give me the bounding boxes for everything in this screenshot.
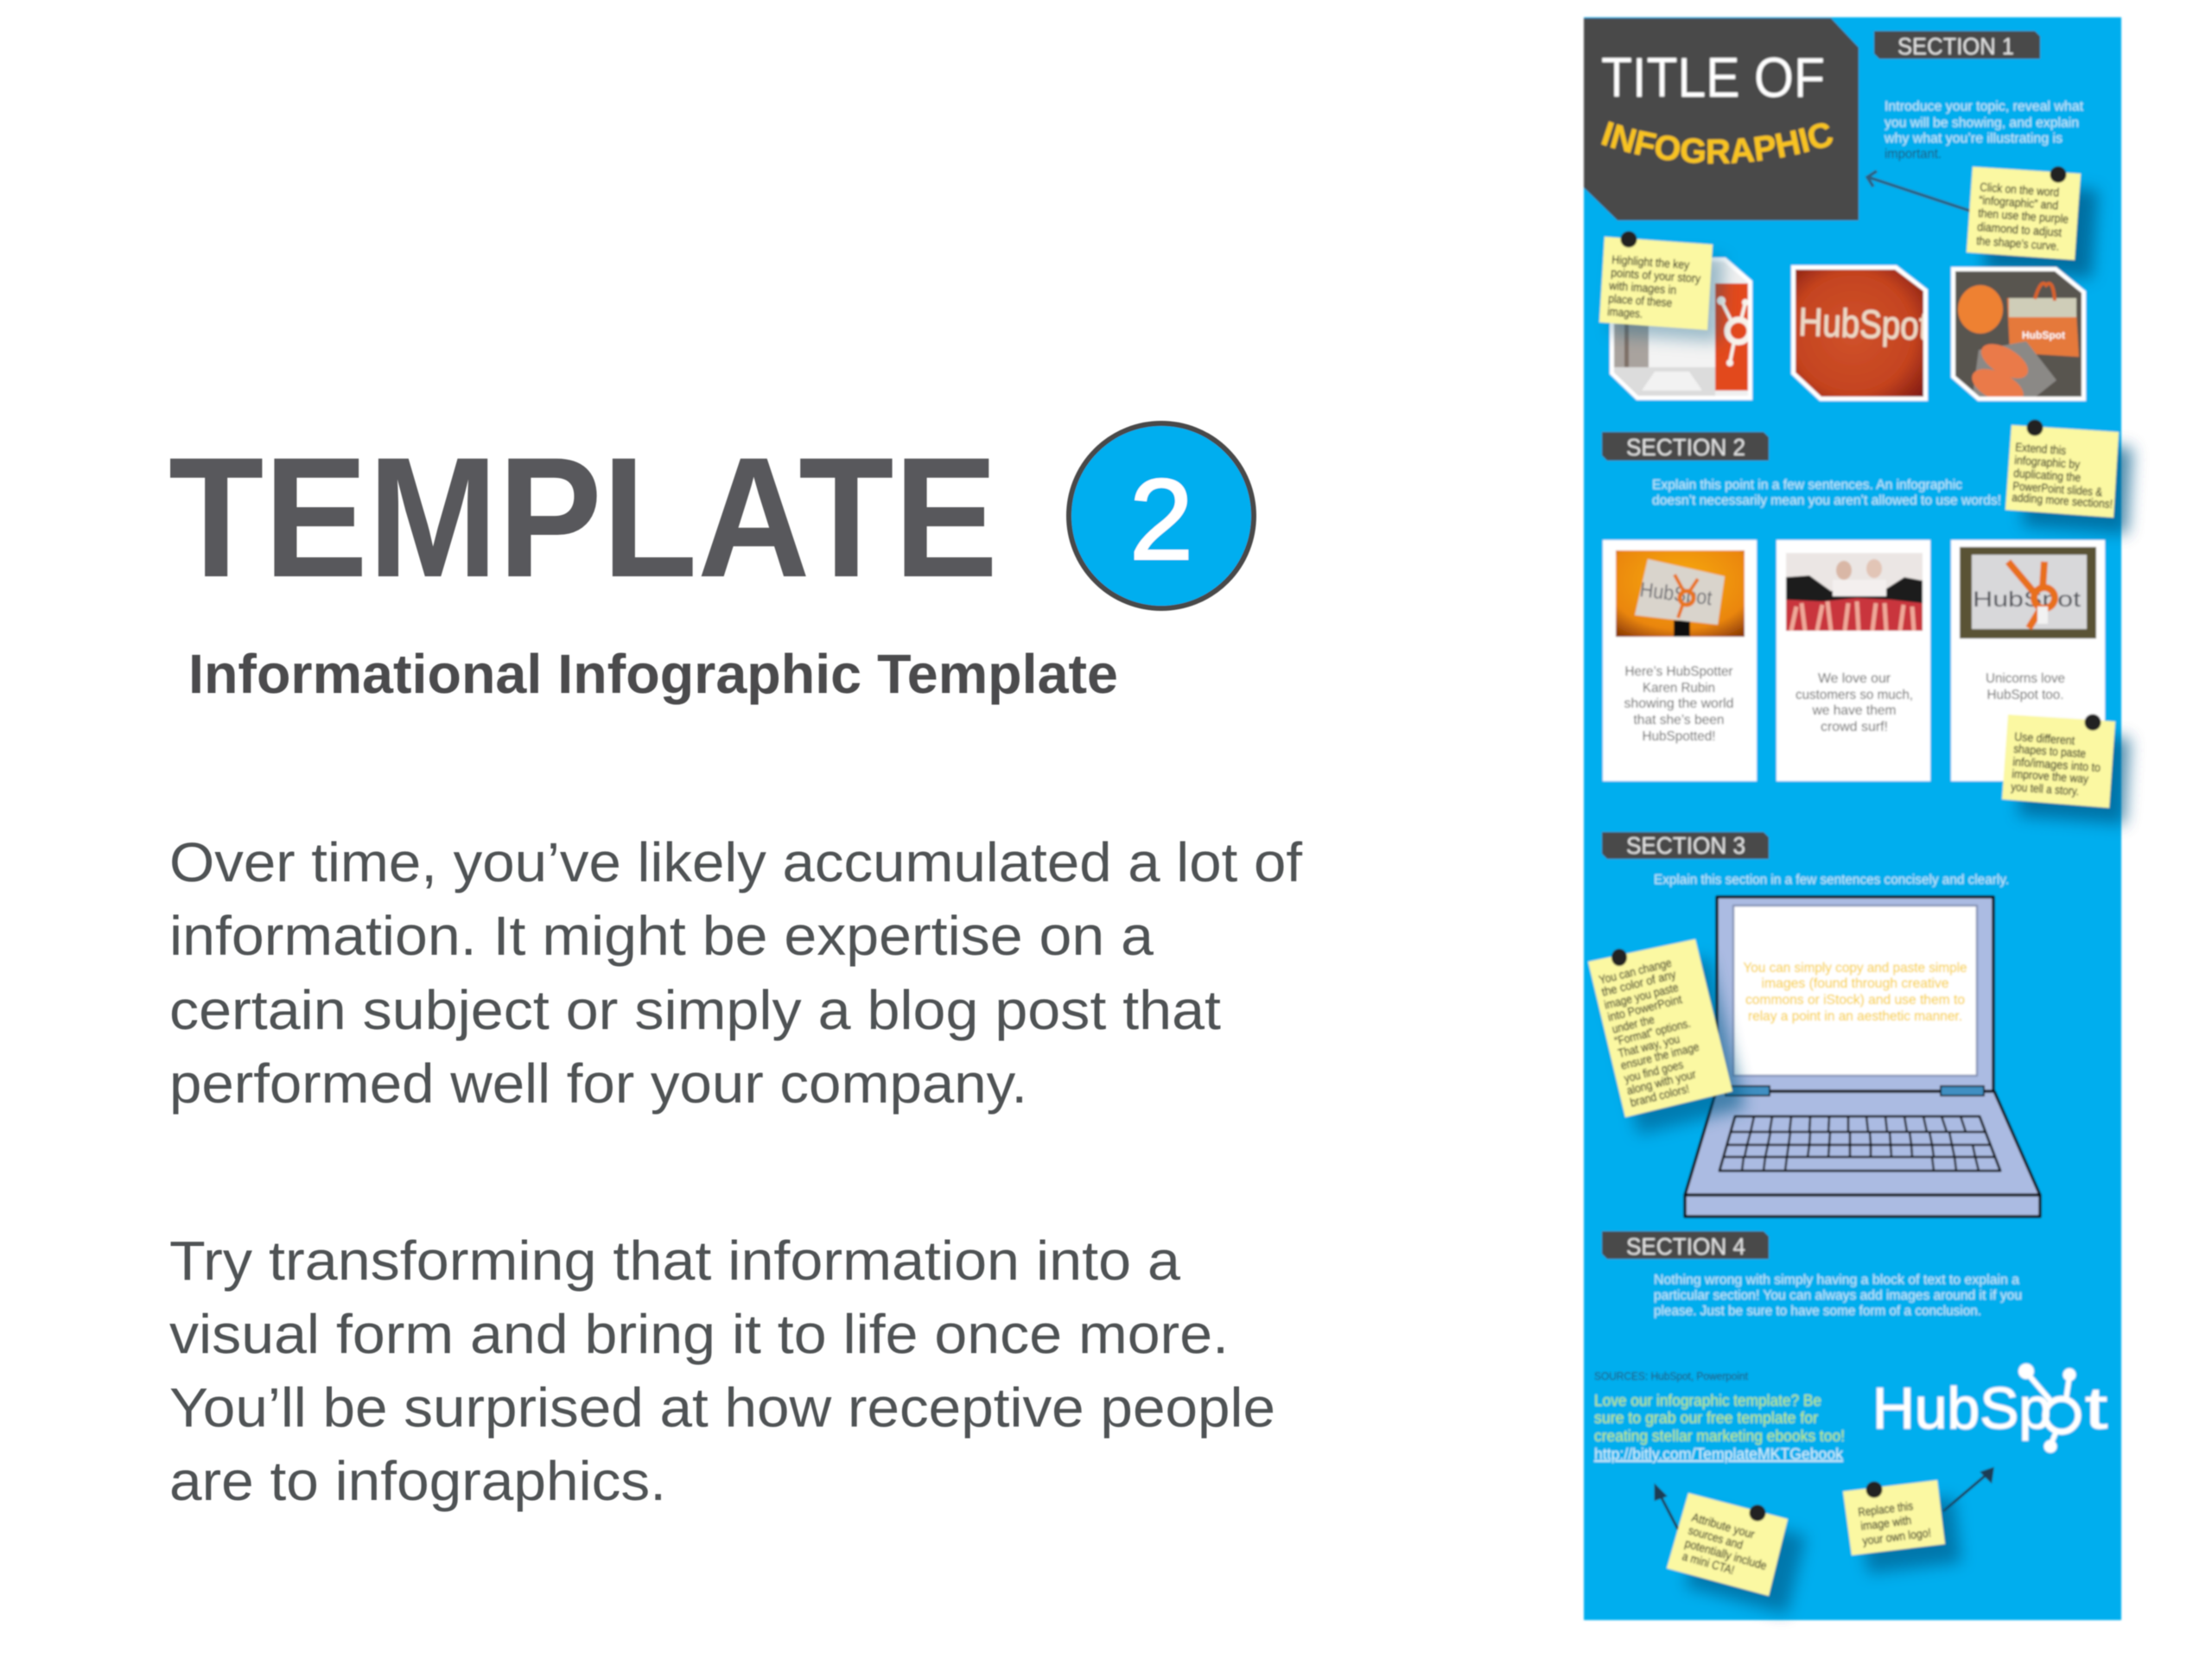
- sticky note: change image color: ensure the image: [1619, 1039, 1700, 1072]
- section 2 tab: SECTION 2: [1626, 434, 1745, 461]
- laptop lid and screen: You can simply copy and paste simple: [1744, 961, 1967, 976]
- sticky note: change image color: [1588, 939, 1745, 1135]
- sticky note: highlight key points: Highlight the key: [1611, 252, 1690, 271]
- paragraph 2: visual form and bring it to life once more.: [169, 1303, 1229, 1365]
- sticky note: change image color: the color of any: [1600, 967, 1677, 999]
- laptop lid and screen: commons or iStock) and use them to: [1745, 993, 1965, 1007]
- arrow: to title: [1867, 171, 1970, 211]
- sticky note: curve tip: then use the purple: [1978, 206, 2069, 226]
- paragraph 1: information. It might be expertise on a: [169, 905, 1154, 967]
- section 1 text: [1884, 99, 2084, 162]
- sticky note: change image color: under the: [1611, 1012, 1656, 1036]
- paragraph 1: performed well for your company.: [169, 1052, 1027, 1115]
- sticky note: use different shapes: info/images into to: [2012, 754, 2101, 774]
- sticky note: extend: adding more sections!: [2012, 490, 2113, 511]
- card 1: HubSpotted!: [1642, 729, 1716, 744]
- card 2 photo: [1786, 553, 1923, 631]
- sticky note: curve tip: “infographic” and: [1979, 193, 2059, 212]
- section 1 text: you will be showing, and explain: [1885, 116, 2079, 130]
- section 2 text: [1652, 478, 2001, 508]
- sticky note: change image color: image you paste: [1603, 980, 1680, 1012]
- sticky note: highlight key points: place of these: [1608, 291, 1673, 309]
- section 3 tab: SECTION 3: [1626, 832, 1745, 859]
- HubSpot logo: [1872, 1363, 2107, 1453]
- section 2 text: doesn’t necessarily mean you aren’t allowed to use words!: [1652, 493, 2001, 508]
- sticky note: attribute sources: Attribute your: [1690, 1510, 1757, 1541]
- call to action: [1594, 1391, 1845, 1463]
- sticky note: change image color: into PowerPoint: [1606, 992, 1683, 1024]
- card 1: [1603, 540, 1757, 781]
- paragraph 2: Try transforming that information into a: [169, 1230, 1180, 1292]
- section 4 text: [1654, 1273, 2022, 1319]
- sticky note: replace logo: Replace this: [1857, 1498, 1914, 1519]
- sticky note: use different shapes: shapes to paste: [2013, 741, 2087, 760]
- title block: INFOGRAPHIC: [1600, 119, 1834, 166]
- photo: office: [1610, 257, 1752, 400]
- sticky note: extend: Extend this: [2015, 440, 2067, 457]
- sticky note: highlight key points: with images in: [1608, 278, 1677, 296]
- panel background: [1584, 17, 2121, 1620]
- card 3: [1951, 540, 2105, 781]
- card 2: crowd surf!: [1821, 720, 1888, 734]
- sticky note: extend: PowerPoint slides &: [2012, 479, 2103, 499]
- card 1: that she’s been: [1633, 713, 1725, 728]
- card 3: Unicorns love: [1986, 671, 2065, 686]
- sticky note: replace logo: your own logo!: [1861, 1525, 1932, 1548]
- section 4 text: please. Just be sure to have some form of a conclusion.: [1654, 1304, 1981, 1319]
- sticky note: extend: infographic by: [2014, 453, 2081, 471]
- sticky note: use different shapes: [2002, 714, 2130, 824]
- sticky note: curve tip: [1967, 166, 2098, 278]
- photo: HubSpot swag: HubSpot: [2022, 329, 2065, 341]
- laptop lid and screen: images (found through creative: [1761, 976, 1949, 991]
- card 2: We love our: [1818, 671, 1891, 686]
- sticky note: replace logo: image with: [1859, 1513, 1912, 1533]
- sticky note: change image color: You can change: [1598, 956, 1673, 987]
- laptop base and keyboard: [1685, 1086, 2040, 1217]
- arrow: to sources: [1656, 1486, 1678, 1529]
- laptop illustration: [1685, 897, 2040, 1217]
- section 1 text: Introduce your topic, reveal what: [1885, 99, 2084, 114]
- laptop lid and screen: [1717, 897, 1993, 1091]
- sticky note: change image color: brand colors!: [1629, 1081, 1691, 1109]
- paragraph 1: [169, 831, 1302, 1115]
- card 1: showing the world: [1624, 696, 1733, 711]
- section 4 tab: SECTION 4: [1626, 1233, 1745, 1260]
- sticky note: use different shapes: you tell a story.: [2011, 779, 2080, 798]
- laptop lid and screen: relay a point in an aesthetic manner.: [1748, 1009, 1962, 1024]
- sticky note: use different shapes: Use different: [2014, 729, 2075, 747]
- number badge: [1069, 423, 1254, 608]
- section 1 text: important.: [1885, 147, 1942, 162]
- section 1 text: why what you’re illustrating is: [1884, 131, 2063, 146]
- call to action: creating stellar marketing ebooks too!: [1594, 1427, 1845, 1445]
- sticky note: change image color: you find goes: [1623, 1057, 1685, 1085]
- photo: HubSpot swag: [1951, 267, 2086, 410]
- sticky note: change image color: along with your: [1625, 1066, 1698, 1097]
- paragraph 1: certain subject or simply a blog post that: [169, 979, 1221, 1041]
- sticky note: change image color: “Format” options.: [1613, 1016, 1692, 1048]
- HubSpot logo: t: [2085, 1376, 2107, 1441]
- card 1: Here’s HubSpotter: [1624, 664, 1733, 679]
- sticky note: curve tip: diamond to adjust: [1977, 219, 2063, 239]
- section 4 text: Nothing wrong with simply having a block of text to explain a: [1654, 1273, 2019, 1287]
- sticky note: attribute sources: a mini CTA!: [1681, 1549, 1736, 1577]
- card 1 photo: HubSpot: [1638, 578, 1713, 610]
- sticky note: extend: [2005, 420, 2133, 534]
- call to action: Love our infographic template? Be: [1594, 1391, 1821, 1409]
- panel: infographic preview: [1582, 16, 2145, 1624]
- call to action: sure to grab our free template for: [1594, 1408, 1818, 1427]
- number badge: 2: [1129, 456, 1193, 584]
- paragraph 2: are to infographics.: [169, 1450, 666, 1512]
- subtitle: Informational Infographic Template: [188, 643, 1118, 705]
- sticky note: attribute sources: [1667, 1493, 1806, 1614]
- paragraph 2: You’ll be surprised at how receptive people: [169, 1376, 1275, 1439]
- photo: HubSpot fabric: HubSpot: [1798, 299, 1929, 348]
- section 1 tab: SECTION 1: [1897, 33, 2014, 60]
- section 3 text: Explain this section in a few sentences concisely and clearly.: [1654, 873, 2009, 887]
- sticky note: highlight key points: [1599, 232, 1725, 342]
- sticky note: highlight key points: images.: [1607, 304, 1643, 321]
- title block: [1583, 17, 1860, 222]
- section 4 text: particular section! You can always add images around it if you: [1654, 1288, 2022, 1303]
- card 2: [1777, 540, 1930, 781]
- title block: TITLE OF: [1601, 46, 1825, 109]
- arrow: to logo: [1943, 1469, 1993, 1511]
- card 3: HubSpot too.: [1987, 688, 2063, 702]
- paragraph 1: Over time, you’ve likely accumulated a lot of: [169, 831, 1302, 893]
- sticky note: attribute sources: sources and: [1687, 1523, 1745, 1552]
- card 2: customers so much,: [1796, 688, 1913, 702]
- sticky note: curve tip: the shape’s curve.: [1976, 233, 2060, 253]
- call to action: http://bitly.com/TemplateMKTGebook: [1594, 1445, 1844, 1463]
- sticky note: use different shapes: improve the way: [2012, 766, 2089, 785]
- paragraph 2: [169, 1230, 1275, 1512]
- sticky note: extend: duplicating the: [2013, 466, 2082, 484]
- section 2 text: Explain this point in a few sentences. An infographic: [1652, 478, 1962, 493]
- sticky note: highlight key points: points of your story: [1611, 265, 1701, 285]
- sticky note: attribute sources: potentially include: [1683, 1536, 1769, 1573]
- sources line: SOURCES: HubSpot, Powerpoint: [1594, 1370, 1749, 1382]
- sticky note: replace logo: [1843, 1480, 1961, 1573]
- card 1 photo: [1616, 550, 1745, 637]
- heading: TEMPLATE: TEMPLATE: [168, 422, 998, 613]
- card 1: Karen Rubin: [1643, 681, 1715, 696]
- card 3 photo: [1960, 547, 2096, 639]
- photo: HubSpot fabric: [1791, 265, 1929, 401]
- card 2: we have them: [1812, 703, 1896, 718]
- left column: template description: [168, 422, 1302, 1512]
- card 3 photo: HubSpot: [1973, 588, 2081, 612]
- sticky note: curve tip: Click on the word: [1980, 180, 2060, 199]
- sticky note: change image color: That way, you: [1617, 1032, 1681, 1060]
- HubSpot logo: HubSp: [1872, 1376, 2051, 1441]
